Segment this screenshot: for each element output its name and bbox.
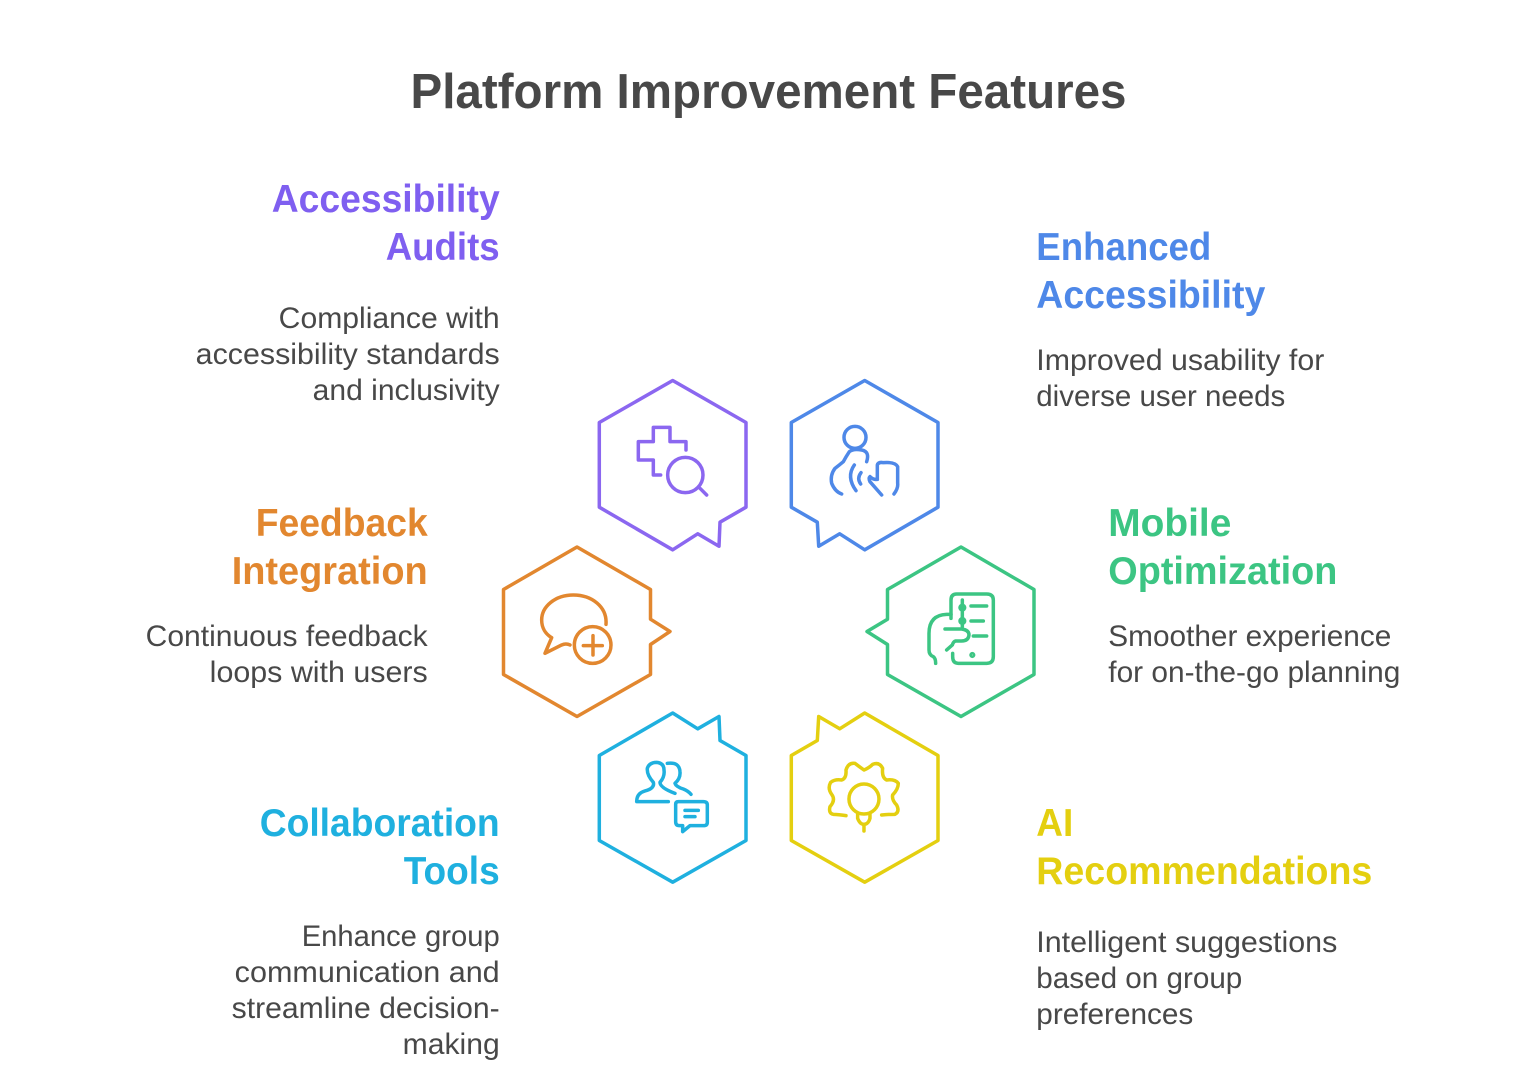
hexagon: cyan: [599, 713, 746, 882]
heading: feedback integration: Feedback: [256, 502, 428, 545]
text: accessibility audits description: [196, 302, 500, 407]
heading: accessibility audits: Audits: [386, 226, 500, 269]
icon: speech bubble with plus: [542, 595, 611, 663]
heading: collaboration tools: [260, 802, 500, 893]
text: collaboration tools description: communication and: [235, 956, 500, 989]
panel: feedback integration: [146, 502, 670, 716]
panel: accessibility audits: [196, 178, 746, 550]
icon: people with chat bubble: [637, 762, 707, 832]
heading: accessibility audits: Accessibility: [272, 178, 500, 221]
heading: enhanced accessibility: [1036, 226, 1266, 317]
text: mobile optimization description: [1108, 620, 1400, 689]
text: enhanced accessibility description: Improved usability for: [1036, 344, 1324, 377]
text: enhanced accessibility description: diverse user needs: [1036, 380, 1285, 413]
icon: person with touch gesture: [831, 426, 898, 495]
text: mobile optimization description: for on-the-go planning: [1108, 656, 1400, 689]
heading: mobile optimization: Optimization: [1108, 550, 1337, 593]
heading: accessibility audits: [272, 178, 500, 269]
hexagon: green: [867, 547, 1034, 716]
text: collaboration tools description: Enhance group: [302, 920, 500, 953]
heading: enhanced accessibility: Accessibility: [1036, 274, 1266, 317]
heading: enhanced accessibility: Enhanced: [1036, 226, 1211, 269]
text: feedback integration description: loops with users: [210, 656, 428, 689]
panel: enhanced accessibility: [791, 226, 1324, 550]
text: collaboration tools description: [232, 920, 500, 1061]
text: collaboration tools description: streamline decision-: [232, 992, 500, 1025]
text: collaboration tools description: making: [403, 1028, 500, 1061]
icon: gear with light bulb: [829, 763, 898, 831]
icon: medical cross with magnifier: [638, 427, 707, 495]
panel: AI recommendations: [791, 713, 1372, 1031]
heading: mobile optimization: [1108, 502, 1337, 593]
hexagon: purple: [599, 380, 746, 550]
heading: feedback integration: [232, 502, 428, 593]
text: feedback integration description: Continuous feedback: [146, 620, 428, 653]
heading: collaboration tools: Collaboration: [260, 802, 500, 845]
hexagon: blue: [791, 380, 938, 550]
heading: AI recommendations: AI: [1036, 802, 1073, 845]
text: accessibility audits description: Compliance with: [279, 302, 500, 335]
heading: AI recommendations: [1036, 802, 1372, 893]
text: accessibility audits description: and inclusivity: [313, 374, 500, 407]
text: enhanced accessibility description: [1036, 344, 1324, 413]
heading: collaboration tools: Tools: [404, 850, 500, 893]
text: AI recommendations description: Intelligent suggestions: [1036, 926, 1337, 959]
hexagon: orange: [504, 547, 670, 716]
text: AI recommendations description: [1036, 926, 1337, 1031]
icon: hand holding phone: [929, 594, 993, 663]
panel: mobile optimization: [867, 502, 1400, 716]
text: mobile optimization description: Smoother experience: [1108, 620, 1391, 653]
text: AI recommendations description: preferences: [1036, 998, 1193, 1031]
text: feedback integration description: [146, 620, 428, 689]
text: AI recommendations description: based on group: [1036, 962, 1242, 995]
heading: AI recommendations: Recommendations: [1036, 850, 1372, 893]
panel: collaboration tools: [232, 713, 746, 1061]
text: accessibility audits description: accessibility standards: [196, 338, 500, 371]
heading: feedback integration: Integration: [232, 550, 428, 593]
heading: mobile optimization: Mobile: [1108, 502, 1231, 545]
title: Platform Improvement Features: [410, 65, 1126, 119]
hexagon: yellow: [791, 713, 938, 882]
